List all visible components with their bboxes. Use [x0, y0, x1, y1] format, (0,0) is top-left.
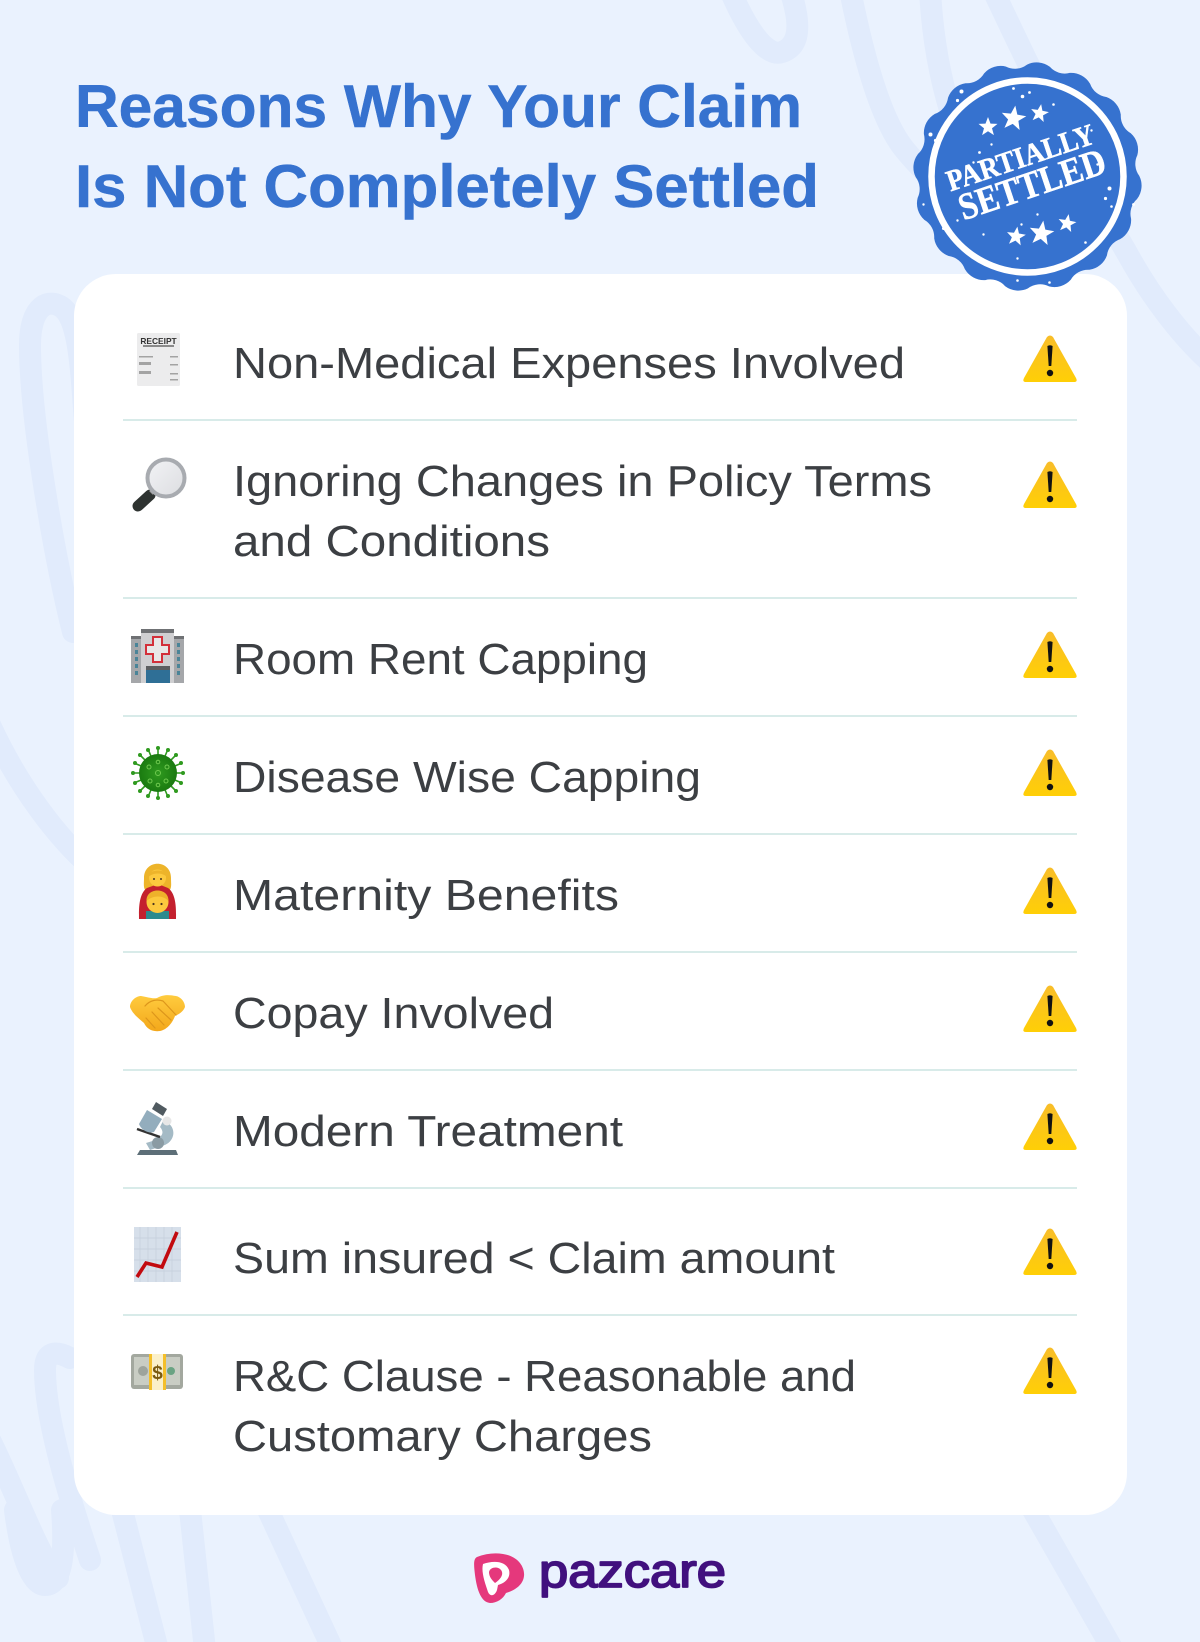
icon: hospital: [131, 629, 184, 683]
icon: pazcare mark: [474, 1553, 524, 1603]
text: reason 2: [233, 457, 932, 566]
title: [75, 73, 819, 220]
icon: warning 4: [1023, 750, 1077, 796]
stamp: partially settled: PARTIALLY: [942, 118, 1099, 198]
icon: handshake: [130, 995, 185, 1031]
icon: virus: [131, 746, 185, 800]
icon: mother and child: [139, 864, 176, 919]
text: reason 7: Modern Treatment: [233, 1107, 623, 1156]
panel: reasons list: [74, 274, 1127, 1515]
text: reason 9: [233, 1352, 856, 1461]
logo: pazcare: pazcare: [539, 1544, 726, 1597]
icon: warning 7: [1023, 1104, 1077, 1150]
icon: magnifying glass: [138, 460, 184, 506]
icon: warning 1: [1023, 336, 1077, 382]
title: Reasons Why Your Claim: [75, 73, 802, 140]
icon: rising chart: [134, 1227, 181, 1282]
stamp: partially settled: [914, 63, 1141, 290]
text: reason 2: and Conditions: [233, 517, 550, 566]
title: Is Not Completely Settled: [75, 153, 819, 220]
icon: warning 2: [1023, 462, 1077, 508]
icon: banknotes: [131, 1354, 183, 1390]
text: reason 6: Copay Involved: [233, 989, 554, 1038]
text: reason 1: Non-Medical Expenses Involved: [233, 339, 905, 388]
text: reason 2: Ignoring Changes in Policy Terms: [233, 457, 932, 506]
text: reason 8: Sum insured < Claim amount: [233, 1234, 835, 1283]
text: reason 4: Disease Wise Capping: [233, 753, 701, 802]
icon: banknotes: $: [152, 1363, 163, 1384]
icon: warning 8: [1023, 1228, 1077, 1275]
icon: warning 3: [1023, 632, 1077, 678]
logo: pazcare: [474, 1544, 726, 1603]
stamp: partially settled: SETTLED: [953, 141, 1111, 229]
icon: microscope: [137, 1102, 178, 1155]
icon: warning 5: [1023, 868, 1077, 914]
text: reason 3: Room Rent Capping: [233, 635, 648, 684]
icon: receipt: [137, 333, 180, 386]
icon: receipt: RECEIPT: [140, 336, 178, 346]
icon: warning 9: [1023, 1348, 1077, 1394]
text: reason 9: R&C Clause - Reasonable and: [233, 1352, 856, 1401]
text: reason 9: Customary Charges: [233, 1412, 652, 1461]
text: reason 5: Maternity Benefits: [233, 871, 619, 920]
icon: warning 6: [1023, 986, 1077, 1032]
